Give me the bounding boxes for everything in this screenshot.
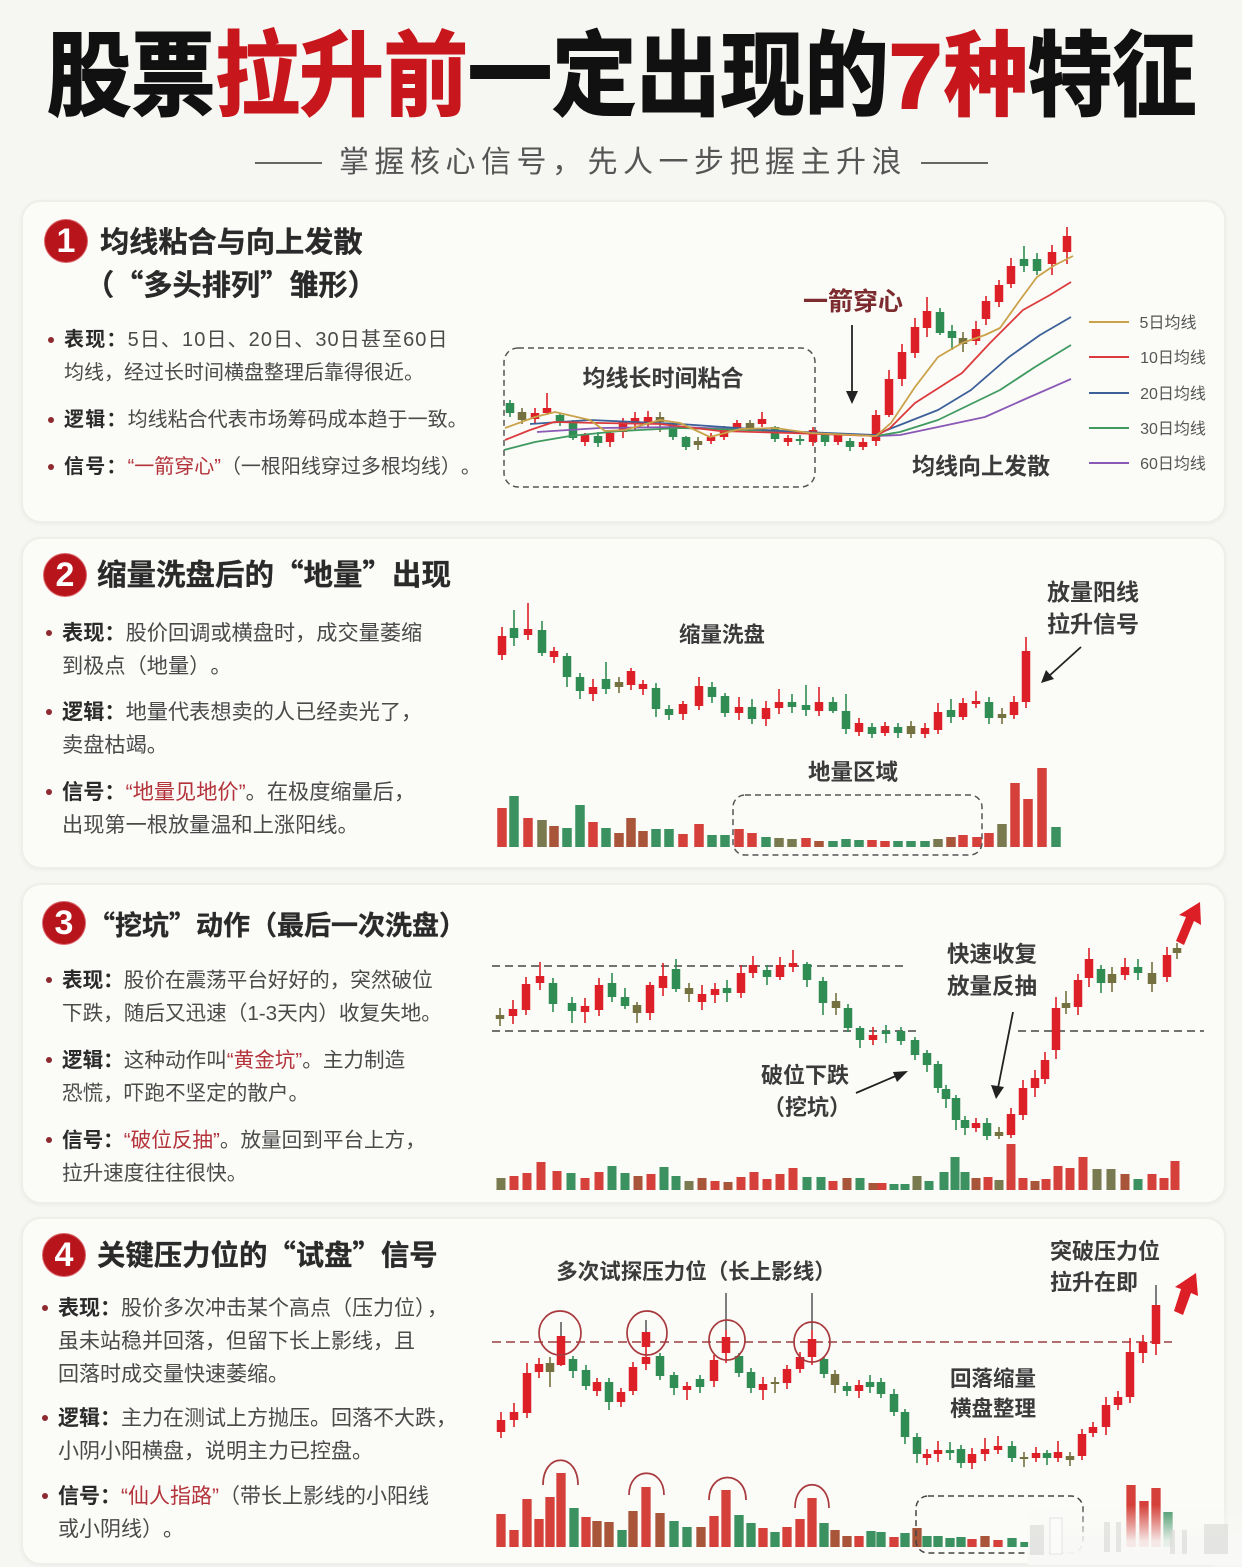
volume bars bbox=[501, 1473, 1168, 1547]
label: fast recovery: 快速收复 bbox=[947, 942, 1037, 967]
volume arcs bbox=[543, 1460, 829, 1508]
number badge 3 bbox=[43, 902, 85, 944]
number badge 3: 3 bbox=[55, 904, 73, 942]
candlesticks bbox=[501, 1285, 1156, 1469]
text: performance bbox=[42, 1296, 448, 1386]
platform dashed lines bbox=[492, 966, 1204, 1031]
number badge 4: 4 bbox=[55, 1236, 73, 1274]
text: performance: 表现：5日、10日、20日、30日甚至60日 bbox=[64, 329, 449, 351]
chart 2: candlesticks and volume bbox=[497, 579, 1139, 856]
chart 1: candlesticks with moving averages bbox=[503, 227, 1206, 488]
heading 1 bbox=[85, 219, 377, 304]
red rising arrow bbox=[1176, 902, 1201, 945]
arrow down to breakout bbox=[846, 325, 858, 404]
dashed box: long convergence bbox=[504, 348, 815, 487]
label: high volume bullish candle: 放量阳线 bbox=[1047, 579, 1139, 605]
moving average lines bbox=[504, 256, 1073, 450]
text: signal: 出现第一根放量温和上涨阳线。 bbox=[62, 814, 359, 837]
dashed box: low volume consolidation bbox=[916, 1496, 1083, 1553]
label: long convergence: 均线长时间粘合 bbox=[582, 365, 744, 391]
text: performance: 虽未站稳并回落，但留下长上影线，且 bbox=[58, 1330, 415, 1353]
text: performance bbox=[46, 969, 442, 1025]
text: logic bbox=[46, 1049, 405, 1105]
text: signal: 或小阴线）。 bbox=[58, 1518, 184, 1541]
text: performance: 表现：股价多次冲击某个高点（压力位）， bbox=[58, 1297, 448, 1320]
panel: 2 shrinking volume bbox=[21, 537, 1226, 869]
label: fast recovery: 放量反抽 bbox=[947, 974, 1037, 999]
number badge 1 bbox=[45, 220, 87, 262]
text: logic: 逻辑：地量代表想卖的人已经卖光了， bbox=[62, 701, 422, 724]
text: performance: 回落时成交量快速萎缩。 bbox=[58, 1363, 289, 1386]
text: signal: 信号：“仙人指路”（带长上影线的小阳线 bbox=[58, 1485, 429, 1508]
number badge 4 bbox=[43, 1234, 85, 1276]
text: performance: 均线，经过长时间横盘整理后靠得很近。 bbox=[64, 362, 424, 384]
label: breakout imminent: 突破压力位 bbox=[1050, 1239, 1160, 1264]
title: 股票拉升前一定出现的 种特征 bbox=[47, 26, 1196, 128]
legend: 30日均线 bbox=[1140, 420, 1206, 438]
heading 1: （“多头排列”雏形） bbox=[85, 262, 377, 304]
text: performance: 下跌，随后又迅速（1-3天内）收复失地。 bbox=[62, 1002, 442, 1025]
candlesticks bbox=[510, 227, 1067, 451]
volume bars bbox=[501, 1144, 1175, 1190]
number badge 2 bbox=[44, 554, 86, 596]
panel: 3 digging the pit bbox=[21, 883, 1226, 1204]
number badge 1: 1 bbox=[57, 222, 75, 260]
legend: 5日均线 bbox=[1140, 314, 1196, 332]
candlesticks bbox=[502, 603, 1026, 738]
number badge 2: 2 bbox=[56, 556, 74, 594]
heading 1: 均线粘合与向上发散 bbox=[100, 219, 363, 261]
label: fanning upward: 均线向上发散 bbox=[912, 453, 1050, 479]
text: performance: 表现：股价在震荡平台好好的，突然破位 bbox=[62, 969, 433, 992]
text: signal bbox=[46, 1129, 426, 1185]
label: high volume bullish candle: 拉升信号 bbox=[1047, 611, 1139, 637]
arrow to recovery bbox=[991, 1012, 1013, 1099]
heading 2: 缩量洗盘后的“地量”出现 bbox=[97, 552, 451, 594]
text: signal: 信号：“破位反抽”。放量回到平台上方， bbox=[62, 1129, 426, 1152]
dashed box: floor volume zone bbox=[733, 795, 982, 855]
label: breakdown pit: （挖坑） bbox=[763, 1095, 851, 1120]
text: signal: 信号：“地量见地价”。在极度缩量后， bbox=[62, 781, 415, 804]
watermark bbox=[1028, 1505, 1242, 1565]
legend: 10日均线 bbox=[1140, 349, 1206, 367]
label: floor volume zone: 地量区域 bbox=[808, 760, 898, 785]
text: signal: 拉升速度往往很快。 bbox=[62, 1162, 247, 1185]
legend: 20日均线 bbox=[1140, 385, 1206, 403]
text: signal bbox=[46, 780, 415, 837]
label: breakdown pit: 破位下跌 bbox=[761, 1063, 849, 1088]
label: shrinking washout: 缩量洗盘 bbox=[679, 622, 765, 647]
arrow to bullish candle bbox=[1041, 647, 1081, 683]
legend: 60日均线 bbox=[1140, 455, 1206, 473]
text: performance bbox=[46, 622, 422, 678]
legend bbox=[1089, 314, 1206, 473]
text: signal bbox=[42, 1484, 429, 1541]
label: one arrow through the heart: 一箭穿心 bbox=[803, 287, 903, 316]
panel: 4 testing resistance bbox=[21, 1217, 1226, 1565]
resistance dashed line bbox=[492, 1341, 1172, 1343]
subtitle: 掌握核心信号，先人一步把握主升浪 bbox=[339, 146, 907, 179]
text: logic: 小阴小阳横盘，说明主力已控盘。 bbox=[58, 1440, 373, 1463]
text: performance: 到极点（地量）。 bbox=[62, 655, 232, 678]
text: logic: 逻辑：主力在测试上方抛压。回落不大跌， bbox=[58, 1407, 457, 1430]
text: logic: 逻辑：这种动作叫“黄金坑”。主力制造 bbox=[62, 1049, 405, 1072]
label: low volume consolidation: 回落缩量 bbox=[950, 1367, 1036, 1391]
heading 3: “挖坑”动作（最后一次洗盘） bbox=[88, 904, 466, 943]
text: logic: 恐慌，吓跑不坚定的散户。 bbox=[62, 1082, 309, 1105]
text: performance: 表现：股价回调或横盘时，成交量萎缩 bbox=[62, 622, 422, 645]
heading 4: 关键压力位的“试盘”信号 bbox=[97, 1233, 438, 1274]
red rising arrow bbox=[1174, 1273, 1198, 1315]
label: repeated probes: 多次试探压力位（长上影线） bbox=[556, 1259, 836, 1284]
resistance test circles bbox=[539, 1311, 830, 1362]
volume bars bbox=[502, 768, 1056, 847]
text: signal: 信号：“一箭穿心”（一根阳线穿过多根均线）。 bbox=[64, 456, 481, 478]
label: breakout imminent: 拉升在即 bbox=[1050, 1270, 1138, 1295]
label: low volume consolidation: 横盘整理 bbox=[950, 1397, 1036, 1421]
title: 7 bbox=[889, 26, 943, 128]
panel: 1 moving average convergence bbox=[21, 200, 1226, 523]
arrow to pit bbox=[856, 1071, 908, 1093]
candlesticks bbox=[500, 943, 1177, 1140]
text: logic: 卖盘枯竭。 bbox=[62, 734, 168, 757]
text: logic bbox=[42, 1406, 457, 1463]
chart 3: candlesticks and volume bbox=[492, 902, 1204, 1190]
chart 4: candlesticks and volume bbox=[492, 1239, 1228, 1565]
text: performance bbox=[48, 328, 449, 384]
text: logic bbox=[46, 700, 422, 757]
text: logic: 逻辑：均线粘合代表市场筹码成本趋于一致。 bbox=[64, 409, 468, 431]
